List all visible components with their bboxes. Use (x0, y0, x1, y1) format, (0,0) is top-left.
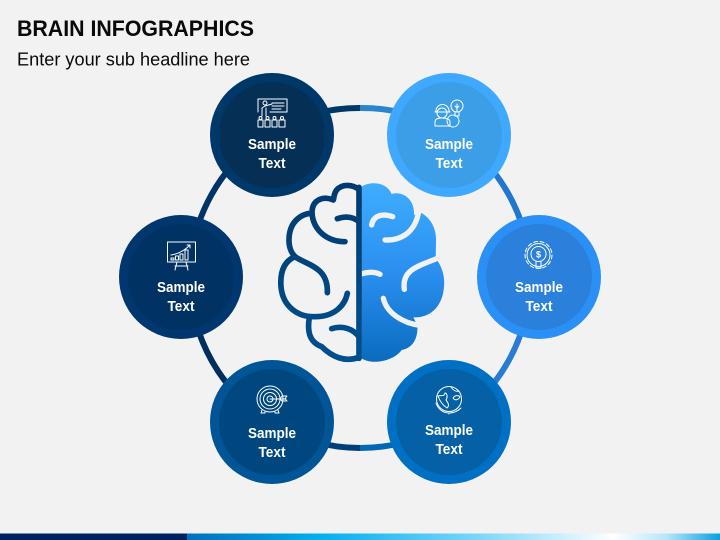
node: bottom left: Text (258, 445, 286, 461)
label: Sample (248, 426, 296, 442)
node: top right (387, 73, 511, 197)
node: bottom right: Text (436, 442, 463, 458)
icon: worker, bulb and gear (435, 100, 463, 127)
brain: right filled half (360, 183, 444, 362)
icon: gear with dollar bulb: $ (536, 250, 541, 260)
icon: target with arrow (257, 386, 287, 413)
icon: presenter with audience (258, 99, 287, 127)
footer bar (0, 534, 720, 540)
icon: growth chart on board (168, 242, 196, 270)
label: Sample (425, 423, 473, 439)
icon: globe (436, 386, 462, 414)
label: Sample (425, 137, 473, 153)
label: Sample (157, 280, 205, 296)
node: right: Text (526, 299, 553, 315)
node: left (119, 215, 243, 339)
central brain (281, 183, 444, 362)
node: top right: Text (436, 156, 463, 172)
node: bottom right (387, 360, 511, 484)
label: Sample (248, 137, 296, 153)
title: BRAIN INFOGRAPHICS (17, 16, 254, 41)
node: left: Text (168, 299, 195, 315)
label: Sample (515, 280, 563, 296)
subtitle: Enter your sub headline here (17, 50, 250, 70)
brain: left outlined half (281, 185, 359, 359)
node: right (477, 215, 601, 339)
node: top left: Text (258, 156, 286, 172)
node: top left (210, 73, 334, 197)
connecting ring (190, 108, 530, 448)
node: bottom left (210, 360, 334, 484)
